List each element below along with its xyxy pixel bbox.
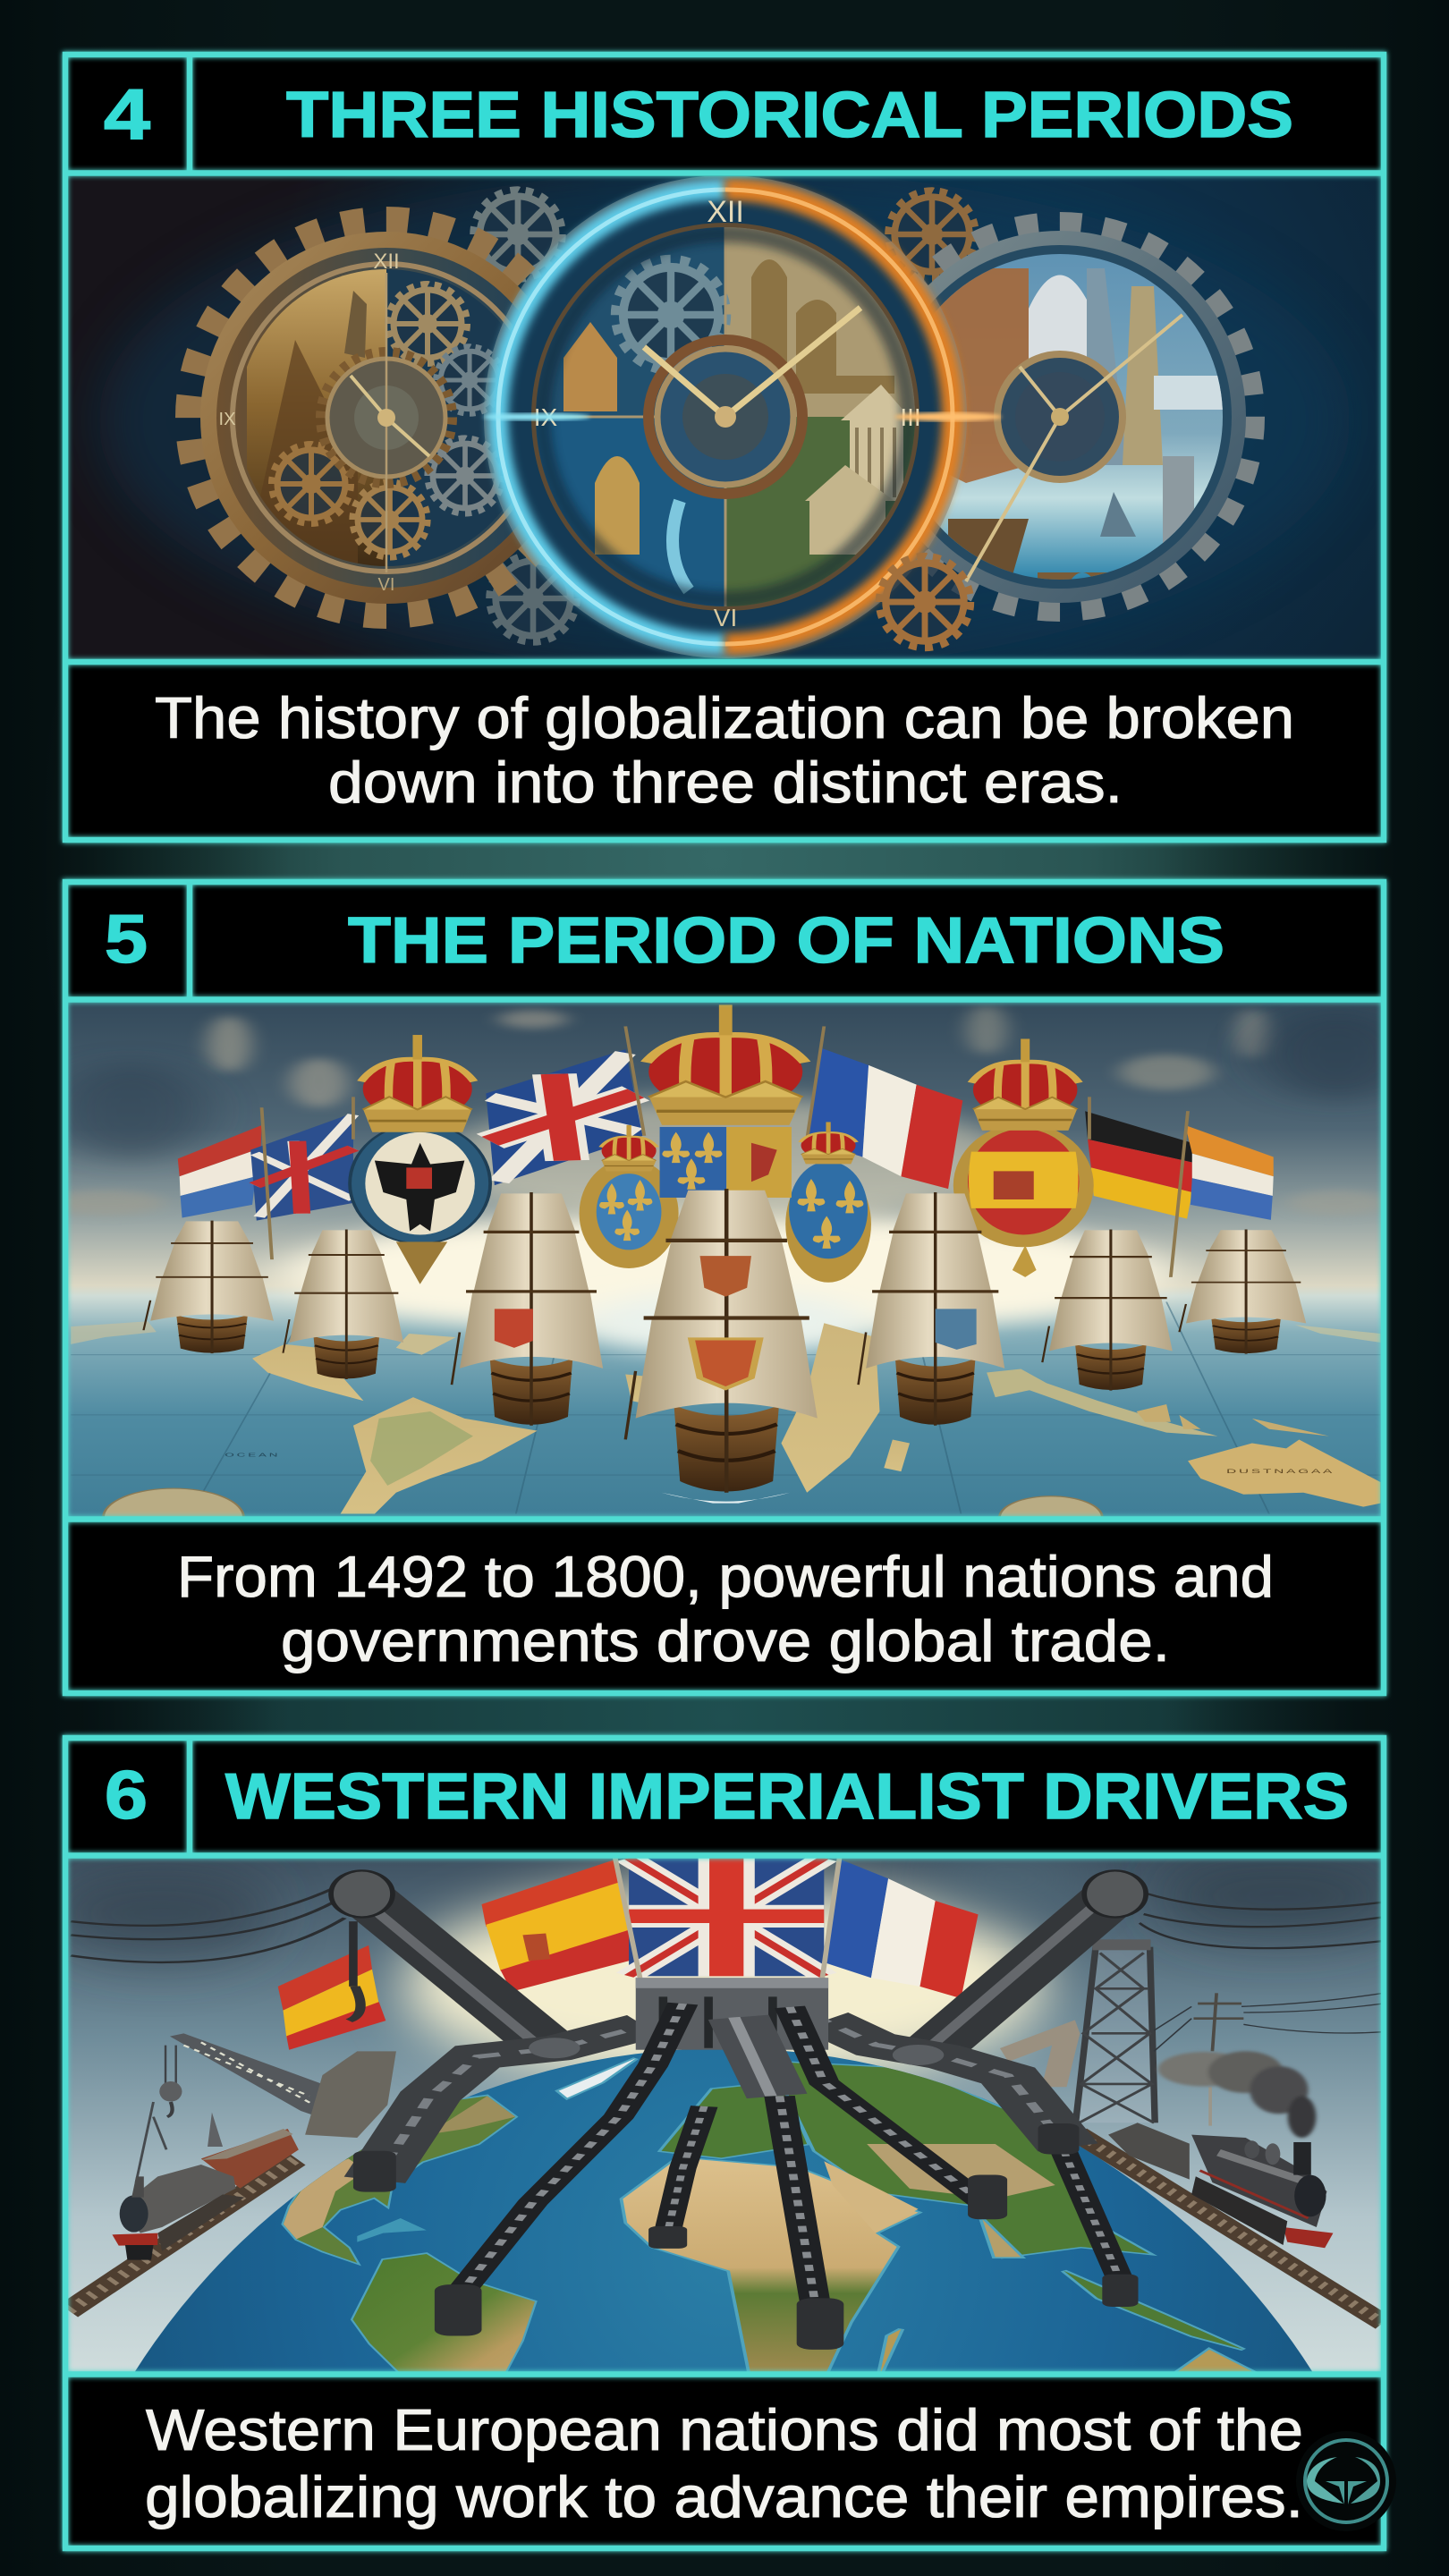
ships xyxy=(143,1189,1306,1504)
Americas xyxy=(284,2096,535,2373)
right clock gear xyxy=(865,193,1255,612)
sea map: DUSTNAGAA xyxy=(1226,1469,1335,1475)
illustration: three clock gears xyxy=(68,170,1381,671)
caption: globalizing work to advance their empires. xyxy=(145,2464,1303,2529)
centre clock gear xyxy=(491,182,960,651)
flags xyxy=(278,1858,979,2050)
right scene: tower, smoke and train xyxy=(1000,1894,1383,2323)
caption xyxy=(177,1544,1274,1674)
badge number 6: 6 xyxy=(105,1758,148,1834)
logo badge xyxy=(1296,2431,1396,2531)
cables xyxy=(71,1887,344,1962)
heading: WESTERN IMPERIALIST DRIVERS xyxy=(225,1761,1349,1833)
header bar xyxy=(105,1758,1349,1834)
frame lines xyxy=(65,55,1384,840)
Eurasia and Africa xyxy=(559,2058,1257,2377)
badge number 5: 5 xyxy=(105,902,148,978)
badge number 4: 4 xyxy=(104,74,151,154)
centre clock gear: XII xyxy=(707,195,744,229)
arms xyxy=(362,1894,555,2052)
centre crown and shield xyxy=(646,1004,805,1198)
caption: The history of globalization can be broken xyxy=(155,685,1294,750)
centre clock gear: VI xyxy=(714,604,737,631)
illustration: ships, flags and map xyxy=(45,998,1415,1546)
caption: governments drove global trade. xyxy=(281,1608,1170,1674)
central block xyxy=(636,1978,828,2050)
heading: THREE HISTORICAL PERIODS xyxy=(286,80,1293,151)
centre clock gear: IX xyxy=(534,403,558,431)
panel 4: three historical periods xyxy=(65,55,1384,840)
left clock gear: XII xyxy=(373,250,400,274)
sea map: OCEAN xyxy=(225,1453,280,1458)
chain machinery xyxy=(71,1870,1146,2350)
caption xyxy=(145,2397,1303,2529)
left clock gear: VI xyxy=(378,575,394,595)
frame lines xyxy=(65,1738,1384,2548)
illustration: globe in chains xyxy=(45,1852,1404,2379)
caption: down into three distinct eras. xyxy=(328,750,1123,815)
eagle crest xyxy=(350,1035,490,1284)
left clock gear: IX xyxy=(219,410,235,429)
sea map xyxy=(71,1301,1381,1517)
arc rails xyxy=(375,2026,644,2180)
left scene: crane and train xyxy=(69,2033,396,2310)
header bar xyxy=(105,902,1224,978)
small crests xyxy=(580,1122,871,1283)
panel 6: western imperialist drivers xyxy=(45,1738,1404,2548)
chain clamps xyxy=(435,2284,482,2336)
far flags xyxy=(178,1026,1274,1277)
caption: Western European nations did most of the xyxy=(146,2397,1303,2462)
left clock gear xyxy=(190,192,583,640)
panel 5: the period of nations xyxy=(45,882,1415,1693)
caption: From 1492 to 1800, powerful nations and xyxy=(177,1544,1274,1609)
globe xyxy=(131,2048,1317,2379)
Spanish crest xyxy=(953,1038,1094,1277)
caption xyxy=(155,685,1294,815)
chains xyxy=(456,2004,682,2298)
header bar xyxy=(104,74,1293,154)
frame lines xyxy=(65,882,1384,1693)
centre clock gear: III xyxy=(900,403,921,431)
heading: THE PERIOD OF NATIONS xyxy=(348,905,1224,977)
